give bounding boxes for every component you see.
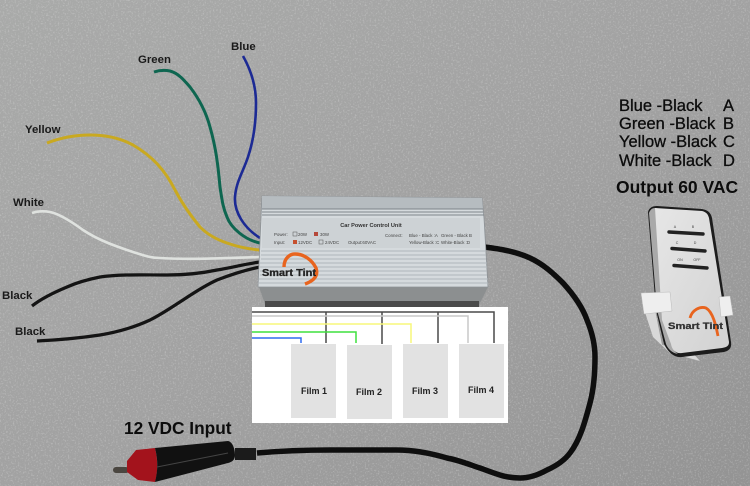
cigarette plug — [113, 441, 256, 482]
connection legend: Green -Black — [619, 115, 716, 133]
connection legend: Yellow -Black — [619, 133, 717, 151]
wire: white — [32, 211, 260, 259]
logo: Smart Tint on remote — [668, 307, 724, 336]
connection legend: C — [723, 133, 735, 151]
unit specs: White-Black :D — [441, 240, 470, 245]
film 2 — [347, 345, 392, 419]
connection legend — [619, 97, 735, 170]
power cable to cigarette plug — [257, 247, 595, 478]
connection legend: White -Black — [619, 152, 712, 170]
unit specs: Green - Black B — [441, 233, 472, 238]
unit specs: Blue - Black :A — [409, 233, 438, 238]
wire: black 2 — [37, 267, 260, 341]
control unit — [258, 196, 488, 307]
remote button labels: ON — [677, 258, 683, 262]
output voltage label: Output 60 VAC — [616, 177, 739, 197]
unit title: Car Power Control Unit — [340, 223, 402, 229]
film 3 — [403, 344, 448, 418]
wire labels: Green — [138, 54, 171, 66]
connection legend: B — [723, 115, 734, 133]
remote silver side band — [649, 208, 678, 354]
wire labels: Blue — [231, 41, 256, 53]
unit specs: 12VDC — [298, 240, 312, 245]
film 1: Film 1 — [301, 386, 327, 396]
wire labels: White — [13, 197, 44, 209]
remote button labels: B — [692, 225, 695, 229]
film 4: Film 4 — [468, 385, 494, 395]
wire: yellow — [47, 135, 260, 250]
unit specs: Power: — [274, 232, 288, 237]
wire labels — [2, 41, 256, 338]
wire labels: Yellow — [25, 124, 61, 136]
film 3: Film 3 — [412, 386, 438, 396]
unit specs: 30W — [320, 232, 330, 237]
wire: green — [154, 70, 260, 243]
unit specs: 20W — [298, 232, 308, 237]
wiring lines — [252, 312, 494, 344]
strain relief — [235, 448, 256, 460]
logo: Smart Tint on unit: Smart Tint — [262, 268, 317, 279]
input voltage label: 12 VDC Input — [124, 418, 232, 438]
remote buttons — [669, 232, 703, 234]
remote control — [641, 206, 733, 361]
unit specs: Connect: — [385, 233, 403, 238]
connection legend: Blue -Black — [619, 97, 703, 115]
remote body outer edge — [648, 206, 731, 357]
logo: Smart Tint on unit — [262, 254, 317, 284]
wire labels: Black — [15, 326, 46, 338]
unit label panel — [262, 218, 480, 248]
wire: black 1 — [32, 262, 260, 306]
wire labels: Black — [2, 290, 33, 302]
remote button labels: D — [694, 241, 697, 245]
connection legend: D — [723, 152, 735, 170]
logo: Smart Tint on remote: Smart Tint — [668, 321, 724, 332]
remote button labels: A — [674, 225, 677, 229]
remote button labels — [674, 225, 701, 262]
unit specs: 24VDC — [325, 240, 339, 245]
wire: blue — [235, 56, 260, 238]
remote back bracket — [642, 303, 700, 361]
plug black body — [155, 441, 235, 482]
unit specs: Input: — [274, 240, 285, 245]
unit specs — [274, 232, 472, 245]
unit specs: Yellow-Black :C — [409, 240, 439, 245]
unit housing — [258, 196, 488, 287]
unit dark lower side — [259, 287, 488, 307]
remote button labels: OFF — [693, 258, 701, 262]
film 2: Film 2 — [356, 387, 382, 397]
remote face — [655, 208, 729, 353]
plug red collar — [127, 448, 157, 482]
film 1 — [291, 344, 336, 418]
unit specs: Output:60VAC — [348, 240, 376, 245]
panel: film wiring diagram — [252, 307, 508, 423]
plug tip — [113, 467, 129, 473]
remote button labels: C — [676, 241, 679, 245]
remote clips — [641, 292, 672, 314]
connection legend: A — [723, 97, 734, 115]
film 4 — [459, 344, 504, 418]
